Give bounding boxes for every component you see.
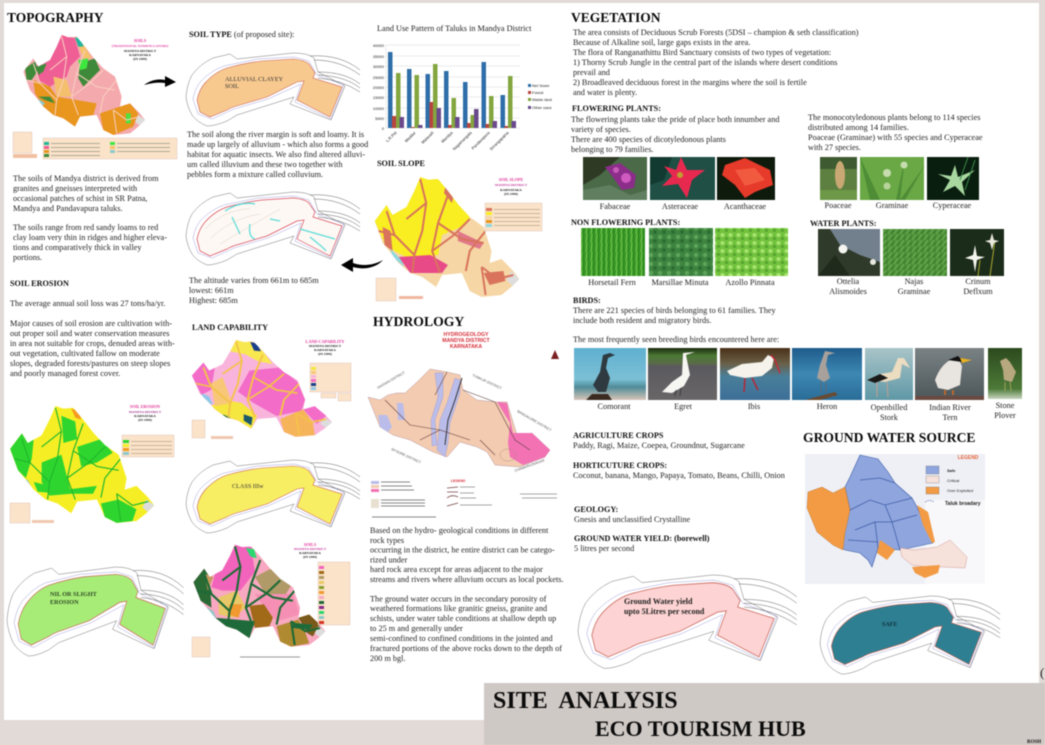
label: CLASS IIIw — [232, 483, 264, 490]
text: soil along river margin: The soil along the river margin is soft and loamy. It is — [187, 130, 364, 139]
y axis labels: 20000 — [373, 85, 385, 90]
text: birds: include both resident and migratory birds. — [573, 316, 711, 325]
label: Stone — [996, 401, 1015, 410]
map title — [495, 177, 528, 196]
label: Indian River — [929, 403, 971, 412]
label — [994, 401, 1016, 420]
text: hydrology: to 25 m and generally under — [370, 624, 463, 633]
map title — [129, 404, 162, 422]
text: monocotyledonous plants: The monocotyledonous plants belong to 114 species — [808, 113, 980, 122]
text: flowering plants: There are 400 species of dicotyledonous plants — [571, 135, 726, 144]
label: Ottelia — [837, 277, 860, 286]
y axis labels: 0 — [382, 126, 385, 131]
text: hydrology: 200 m bgl. — [370, 654, 406, 663]
label: NIL OR SLIGHT — [50, 591, 98, 598]
legend — [925, 455, 981, 507]
map legend — [13, 132, 177, 159]
title band — [484, 683, 1045, 745]
text: flowering plants: variety of species. — [571, 125, 631, 134]
text: flowering plants: The flowering plants take the pride of place both innumber and — [571, 115, 780, 124]
text: monocotyledonous plants: Poaceae (Graminae) with 55 species and Cyperaceae — [808, 133, 983, 142]
map title: LAND CAPABILITY — [306, 339, 344, 344]
photo: heron — [792, 348, 862, 400]
text: vegetation intro — [573, 28, 859, 97]
x axis labels: Nagamangala — [452, 130, 473, 151]
map title: MANDYA DISTRICT — [129, 410, 162, 414]
photo: fabaceae — [583, 157, 647, 200]
text: vegetation intro: The area consists of Deciduous Scrub Forests (5DSI – champion & seth classification) — [573, 28, 859, 37]
bars: net sown — [388, 52, 505, 128]
label: Plover — [994, 411, 1016, 420]
label: Crinum — [965, 277, 991, 286]
text: vegetation intro: prevail and — [573, 68, 611, 77]
photo: cormorant — [574, 348, 646, 400]
label: Deflxum — [963, 287, 993, 296]
label: Comorant — [598, 402, 631, 411]
district labels: HASSAN DISTRICT — [376, 370, 407, 390]
label: Tern — [942, 413, 958, 422]
text: flowering plants: belonging to 79 families. — [571, 145, 654, 154]
map: land capability — [188, 338, 351, 439]
map legend — [192, 562, 350, 657]
text: soil erosion: The average annual soil loss was 27 tons/ha/yr. — [10, 299, 165, 308]
photo: stone plover — [988, 348, 1022, 399]
map title: SOIL EROSION — [130, 404, 160, 409]
y axis labels — [373, 43, 385, 131]
y axis labels: 40000 — [373, 43, 385, 48]
text: agriculture crops — [573, 431, 745, 450]
legend: Over Exploited — [947, 488, 973, 493]
label: Ibis — [748, 402, 760, 411]
map title: (IN 1999) — [138, 418, 152, 422]
photo: crinum defixum — [950, 229, 1004, 276]
x axis labels — [385, 130, 510, 151]
text: soil erosion — [10, 299, 175, 378]
label: Fabaceae — [600, 202, 631, 211]
map title: MANDYA DISTRICT — [294, 547, 327, 551]
heading: vegetation: VEGETATION — [571, 10, 661, 25]
map title: hydrogeology: MANDYA DISTRICT — [442, 338, 491, 344]
legend: Critical — [947, 478, 959, 483]
text: birds: There are 221 species of birds belonging to 61 families. They — [573, 306, 776, 315]
text: hydrology: rized under — [370, 556, 408, 564]
map title: KARNATAKA — [129, 53, 151, 57]
y axis labels: 25000 — [373, 75, 385, 80]
map title: KARNATAKA — [500, 188, 522, 192]
y axis labels: 5000 — [375, 116, 385, 121]
label: Alismoides — [829, 287, 867, 296]
heading: land capability: LAND CAPABILITY — [192, 323, 268, 332]
text: hydrology: The ground water occurs in the secondary porosity of — [370, 594, 547, 604]
label — [624, 597, 705, 616]
label — [963, 277, 993, 296]
y axis labels: 15000 — [373, 95, 385, 100]
heading: water plants: WATER PLANTS: — [810, 219, 876, 228]
text: altitude: lowest: 661m — [189, 286, 234, 295]
map title: (IN 1999) — [504, 192, 518, 196]
x axis labels: Malavalli — [420, 130, 435, 145]
district labels — [376, 370, 553, 473]
text: geology: Gnesis and unclassified Crystalline — [574, 515, 691, 524]
text: soil erosion: out proper soil and water conservation measures — [10, 329, 169, 338]
label: Graminae — [898, 287, 931, 296]
text: monocotyledonous plants: with 27 species. — [808, 143, 861, 152]
text: vegetation intro: 2) Broadleaved deciduous forest in the margins where the soil is fertile — [573, 78, 807, 87]
map: soils — [190, 542, 350, 657]
map title: (IN 1999) — [133, 57, 147, 61]
label — [898, 277, 931, 296]
map title: (TRADITIONAL NOMENCLATURE) — [112, 44, 168, 48]
map title: MANDYA DISTRICT — [124, 49, 157, 53]
photo: horsetail fern — [581, 228, 645, 276]
chart legend — [528, 83, 552, 110]
photo: indian river tern — [915, 348, 984, 400]
text: soil erosion: and poorly managed forest cover. — [10, 369, 120, 378]
text: soil erosion: Major causes of soil erosion are cultivation with- — [10, 319, 172, 328]
map title: KARNATAKA — [134, 414, 156, 418]
text: soil erosion: out vegetation, cultivated fallow on moderate — [10, 349, 160, 358]
text: hydrology: schists, under water table conditions at shallow depth up — [370, 614, 556, 623]
text: ground water yield — [574, 534, 710, 553]
label: Graminae — [876, 201, 909, 210]
x axis labels: Pandavapura — [470, 130, 491, 151]
bar chart: land use — [373, 43, 552, 151]
map title: hydrogeology: HYDROGEOLOGY — [444, 332, 489, 338]
label — [929, 403, 971, 422]
photo: egret — [648, 348, 717, 400]
heading: soil type: SOIL TYPE (of proposed site): — [189, 30, 294, 39]
label — [50, 591, 98, 606]
map legend — [376, 203, 542, 301]
text: hydrology: hard rock area except for areas adjacent to the major — [370, 565, 543, 574]
site plan: class iiiw — [186, 460, 360, 533]
text: ground water yield: GROUND WATER YIELD: (borewell) — [574, 534, 710, 543]
photo: najas graminae — [883, 229, 947, 276]
text: vegetation intro: 1) Thorny Scrub Jungle in the central part of the islands where desert conditions — [573, 58, 837, 67]
legend: LEGEND — [958, 455, 979, 461]
text: soil origin: portions. — [13, 253, 42, 262]
label: upto 5Litres per second — [624, 607, 705, 616]
text: horticulture crops: HORTICUTURE CROPS: — [573, 461, 667, 470]
map: soil erosion — [6, 404, 174, 525]
y axis labels: 10000 — [373, 106, 385, 111]
text: hydrology: streams and rivers where alluvium occurs as local pockets. — [370, 575, 564, 584]
legend: Taluk broadary — [945, 501, 981, 507]
text: agriculture crops: Paddy, Ragi, Maize, Coepea, Groundnut, Sugarcane — [573, 441, 745, 450]
text: vegetation intro: The flora of Ranganathittu Bird Sanctuary consists of two types of vegetation: — [573, 48, 831, 57]
label: SOIL — [225, 83, 239, 90]
label: ALLUVIAL CLAYEY — [225, 76, 284, 83]
site plan: nil or slight erosion — [7, 567, 184, 656]
y axis labels: 35000 — [373, 54, 385, 59]
label — [829, 277, 867, 296]
map: ground water source — [805, 454, 985, 584]
site plan: soil type — [186, 53, 360, 126]
cropped edge character: ( — [1040, 665, 1044, 680]
text: hydrology: semi-confined to confined conditions in the jointed and — [370, 634, 553, 643]
author tag: ROSH — [1027, 740, 1041, 745]
bars: other uses — [400, 108, 516, 128]
label: Heron — [817, 402, 837, 411]
label: Poaceae — [824, 201, 852, 210]
x axis labels: Mandya — [440, 130, 454, 144]
photo: acanthaceae — [717, 157, 775, 200]
district labels: TUMKUR DISTRICT — [472, 373, 503, 391]
map title: SOILS — [134, 38, 147, 43]
text: soil origin: clay loam very thin in ridges and higher eleva- — [13, 233, 167, 242]
text: soil erosion: in area not suitable for crops, denuded areas with- — [10, 339, 175, 348]
map title: MANDYA DISTRICT — [309, 344, 342, 348]
district labels: MYSORE DISTRICT — [391, 447, 422, 465]
map: soil slope — [371, 175, 542, 301]
photo: marsillae minuta — [649, 228, 713, 276]
text: altitude: Highest: 685m — [189, 296, 238, 305]
x axis labels: Maddur — [404, 130, 417, 143]
label: Acanthaceae — [724, 202, 766, 211]
text: monocotyledonous plants — [808, 113, 983, 152]
map title: (IN 1999) — [303, 555, 317, 559]
label: Stork — [880, 413, 899, 422]
photo: poaceae — [820, 157, 857, 200]
label: Najas — [905, 277, 923, 286]
text: soil along river margin: made up largely of alluvium - which also forms a good — [187, 140, 369, 149]
label: Ground Water yield — [624, 597, 693, 606]
text: horticulture crops: Coconut, banana, Mango, Papaya, Tomato, Beans, Chilli, Onion — [573, 471, 785, 480]
label: Egret — [674, 402, 693, 411]
site plan: ground water yield — [578, 575, 797, 668]
text: altitude — [189, 276, 319, 305]
text: soil origin: occasional patches of schist in SR Patna, — [13, 194, 148, 203]
text: soil along river margin — [187, 130, 369, 179]
text: hydrology: rock types — [370, 536, 404, 545]
text: vegetation intro: Because of Alkaline soil, large gaps exists in the area. — [573, 38, 750, 47]
text: flowering plants — [571, 115, 780, 154]
heading: hydrology: HYDROLOGY — [373, 314, 464, 329]
label — [225, 76, 284, 90]
text: soil origin: The soils range from red sandy loams to red — [13, 223, 159, 232]
heading: flowering plants: FLOWERING PLANTS: — [572, 104, 661, 113]
map title: (IN 1999) — [318, 352, 332, 356]
x axis labels: L.R.Pet — [385, 130, 398, 143]
text: birds — [573, 306, 779, 344]
photo: asteraceae — [650, 157, 715, 200]
bars: waste land — [396, 64, 512, 128]
map: soils traditional nomenclature — [13, 33, 177, 159]
text: soil origin: The soils of Mandya district is derived from — [13, 174, 159, 183]
text: soil origin: Mandya and Pandavapura taluks. — [13, 204, 123, 213]
arrow: soils map to soil type — [144, 76, 176, 87]
text: birds: The most frequently seen breeding birds encountered here are: — [573, 335, 779, 344]
label: Horsetail Fern — [588, 278, 636, 287]
map title — [306, 339, 344, 356]
label: Azollo Pinnata — [725, 278, 775, 287]
label — [871, 403, 908, 422]
photo: cyperaceae — [927, 157, 979, 200]
map title — [294, 542, 327, 559]
photo: ibis — [720, 348, 790, 400]
chart legend: Net Sown — [532, 83, 549, 88]
map title: SOILS — [304, 542, 317, 547]
heading: ground water source: GROUND WATER SOURCE — [803, 430, 975, 445]
bars: forest — [392, 102, 509, 128]
photo: ottelia alismoides — [818, 229, 880, 276]
text: vegetation intro: and water is plenty. — [573, 88, 637, 97]
map legend — [192, 363, 351, 439]
text: horticulture crops — [573, 461, 785, 480]
hydrology legend: LEGEND — [451, 479, 466, 483]
title: site analysis: SITE ANALYSIS — [493, 688, 678, 714]
x axis labels: Srirangapatna — [488, 130, 510, 151]
heading: soil erosion: SOIL EROSION — [10, 279, 69, 288]
text: soil along river margin: um called illuvium and these two together with — [187, 160, 343, 169]
label: Openbilled — [871, 403, 908, 412]
map title: SOIL SLOPE — [499, 177, 523, 182]
text: monocotyledonous plants: distributed among 14 families. — [808, 123, 909, 132]
text: hydrology: fractured portions of the above rocks down to the depth of — [370, 644, 562, 653]
map legend — [10, 435, 174, 523]
hydrology legend — [371, 479, 557, 517]
map title: KARNATAKA — [314, 348, 336, 352]
label: Asteraceae — [662, 202, 698, 211]
text: geology — [574, 505, 691, 524]
subtitle: eco tourism hub: ECO TOURISM HUB — [595, 716, 806, 741]
district labels: BANGALORE DISTRICT — [516, 409, 553, 433]
district labels: CHAMARAJNAGAR — [514, 458, 546, 473]
text: soil origin — [13, 174, 167, 262]
text: ground water yield: 5 litres per second — [574, 544, 635, 553]
site plan: contours — [186, 192, 360, 265]
map: hydrogeology — [368, 369, 557, 517]
text: hydrology: occurring in the district, he entire district can be catego- — [370, 546, 555, 554]
text: soil origin: tions and comparatively thick in valley — [13, 243, 142, 252]
label: Cyperaceae — [933, 201, 972, 210]
heading: soil slope: SOIL SLOPE — [377, 159, 426, 168]
text: geology: GEOLOGY: — [574, 505, 618, 514]
text: hydrology — [370, 526, 564, 663]
label: Marsillae Minuta — [651, 278, 709, 287]
map title: hydrogeology — [442, 332, 491, 350]
heading: non flowering plants: NON FLOWERING PLANTS: — [571, 218, 680, 227]
photo: openbilled stork — [865, 348, 913, 400]
arrow: soil slope to site — [341, 258, 383, 272]
map title: hydrogeology: KARNATAKA — [450, 344, 482, 350]
heading: topography: TOPOGRAPHY — [7, 10, 104, 25]
chart legend: Waste land — [532, 97, 552, 102]
site plan: safe — [820, 596, 1000, 674]
legend: Safe — [947, 468, 956, 473]
text: soil along river margin: pebbles form a mixture called colluvium. — [187, 170, 323, 179]
text: hydrology: weathered formations like granitic gneiss, granite and — [370, 604, 548, 613]
photo: graminae — [860, 157, 925, 200]
text: soil along river margin: habitat for aquatic insects. We also find altered alluvi- — [187, 150, 365, 159]
map title: MANDYA DISTRICT — [495, 183, 528, 187]
text: agriculture crops: AGRICULTURE CROPS — [573, 431, 664, 440]
text: hydrology: Based on the hydro- geological conditions in different — [370, 526, 549, 535]
label: EROSION — [50, 599, 79, 606]
text: soil origin: granites and gneisses interpreted with — [13, 184, 138, 193]
chart legend: Other uses — [532, 105, 552, 110]
chart title: Land Use Pattern of Taluks in Mandya District — [377, 24, 532, 33]
chart legend: Forest — [532, 90, 544, 95]
y axis labels: 30000 — [373, 64, 385, 69]
heading: birds: BIRDS: — [573, 296, 601, 305]
text: altitude: The altitude varies from 661m to 685m — [189, 276, 319, 285]
icon: north arrow — [551, 350, 559, 359]
map title — [112, 38, 168, 61]
photo: azollo pinnata — [715, 228, 788, 276]
text: soil erosion: slopes, degraded forests/pastures on steep slopes — [10, 359, 170, 368]
label: SAFE — [882, 622, 897, 628]
map title: KARNATAKA — [299, 551, 321, 555]
